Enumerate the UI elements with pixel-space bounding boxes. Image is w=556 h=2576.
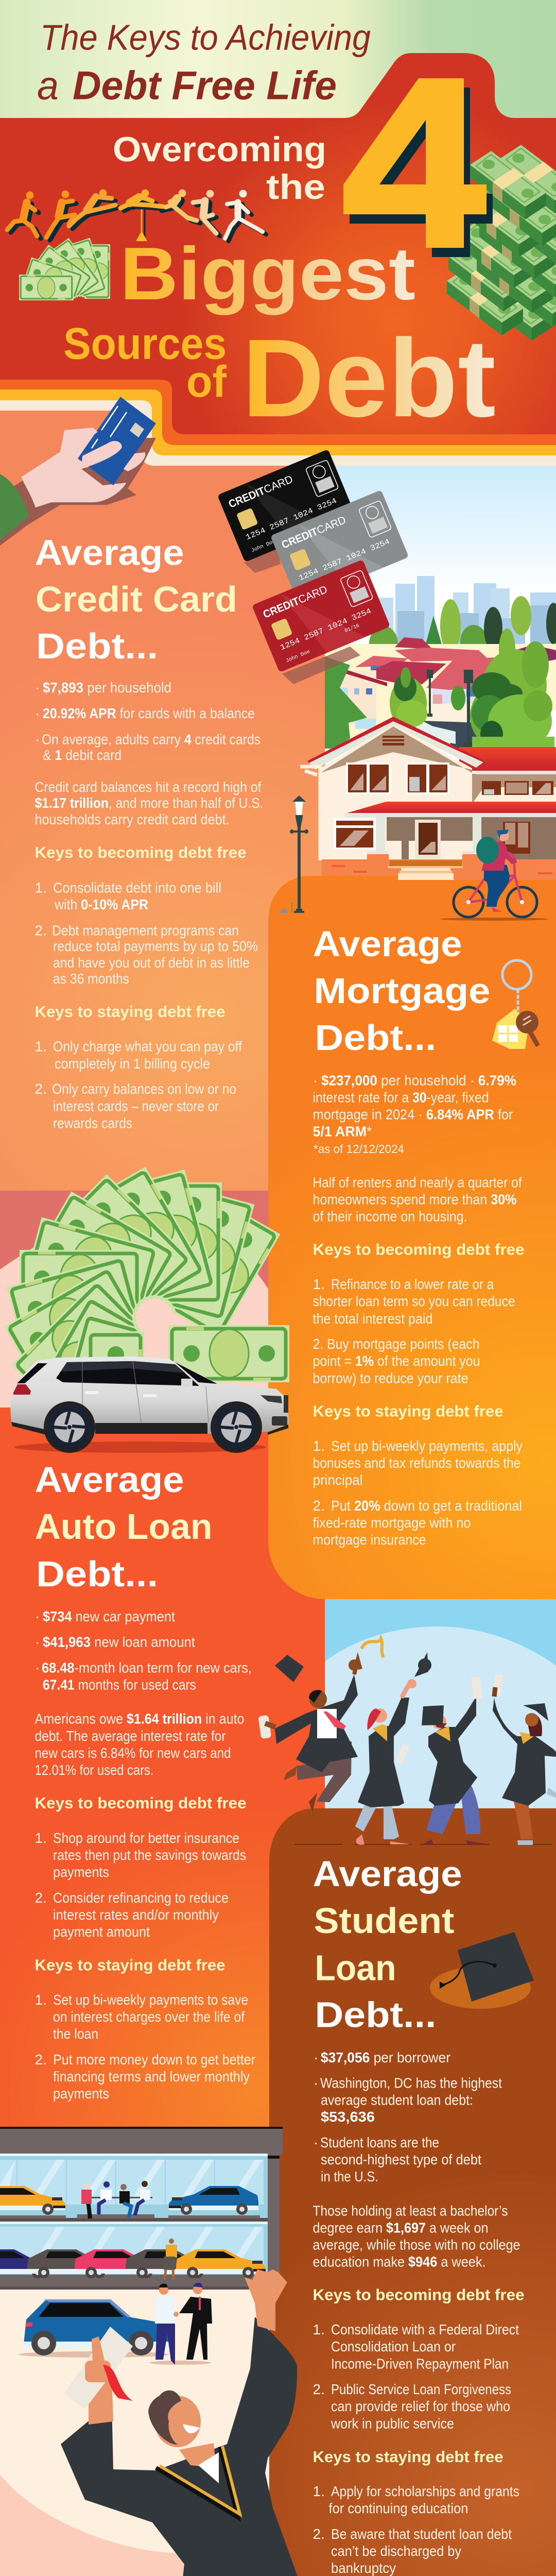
paragraph <box>313 1175 522 1224</box>
panel: car backdrop red band <box>0 1191 269 1408</box>
paragraph <box>35 1710 244 1778</box>
porch roof <box>347 802 556 813</box>
black card <box>217 449 356 562</box>
stats list: · <box>35 680 40 696</box>
black card: 1254 2587 1024 3254 <box>245 497 338 542</box>
card shadows <box>244 549 360 684</box>
stats list: · <box>35 1634 40 1650</box>
roof <box>0 2127 283 2129</box>
paragraph: 12.01% for used cars. <box>35 1762 153 1778</box>
illustration: car dealership <box>0 2127 283 2365</box>
keys to staying debt free: Put more money down to get better <box>53 2052 255 2067</box>
keys to staying debt free: payments <box>53 2086 109 2102</box>
heading: average credit card debt: Average <box>35 533 184 573</box>
keys to staying debt free: Only carry balances on low or no <box>52 1081 236 1097</box>
keys to becoming debt free: 2. Buy mortgage points (each <box>313 1336 480 1352</box>
hand shadow <box>0 438 156 546</box>
red card: 01/16 <box>344 623 360 634</box>
heading: average credit card debt: Credit Card <box>36 579 237 619</box>
stats <box>313 1073 516 1156</box>
keys to becoming debt free: 2. <box>35 922 47 939</box>
title: the keys to achieving a debt free life: Debt Free Life <box>73 63 337 108</box>
paragraph: $1.17 trillion, and more than half of U.S. <box>35 795 264 811</box>
stats list: 68.48-month loan term for new cars, <box>42 1660 252 1675</box>
pillar <box>268 2155 280 2290</box>
panel: salmon credit card background <box>0 392 325 1191</box>
standing man <box>164 2239 177 2279</box>
panel: car backdrop pink circle <box>0 1211 269 1408</box>
graduate: man jumping <box>258 1659 360 1812</box>
raised arm and hand <box>89 2269 287 2425</box>
hurdle <box>136 207 147 241</box>
red card: 1254 2587 1024 3254 <box>279 607 373 652</box>
keys to becoming debt free: Keys to becoming debt free <box>313 2285 524 2304</box>
keys to staying debt free: Keys to staying debt free <box>35 1956 225 1974</box>
stats list <box>314 2049 502 2184</box>
keys to staying debt free <box>313 1402 523 1548</box>
door <box>415 820 441 859</box>
icon: silver SUV <box>10 1357 289 1453</box>
keys to becoming debt free: Refinance to a lower rate or a <box>331 1276 494 1292</box>
icon: large money fan <box>4 1167 289 1452</box>
credit card hand illustration <box>0 397 156 546</box>
vent <box>383 736 404 745</box>
panel: graduation sky <box>325 1599 556 1810</box>
keys to staying debt free: for continuing education <box>328 2500 468 2516</box>
heading: average mortgage debt <box>313 924 490 1058</box>
heading: overcoming the: the <box>266 167 325 207</box>
keys to staying debt free: fixed-rate mortgage with no <box>313 1515 471 1531</box>
keys to becoming debt free: interest rates and/or monthly <box>53 1907 219 1923</box>
keys to staying debt free: can’t be discharged by <box>331 2543 461 2559</box>
sleeve <box>0 474 29 540</box>
keys to staying debt free: Put 20% down to get a traditional <box>331 1498 522 1514</box>
keys to becoming debt free <box>35 843 258 987</box>
keys to staying debt free: Keys to staying debt free <box>35 1003 225 1021</box>
graduate: man with beard <box>422 1676 483 1834</box>
street lamps in background <box>427 670 473 748</box>
keys to staying debt free <box>35 1003 242 1131</box>
panel text: student loan debt <box>313 1854 534 2576</box>
red card <box>252 560 390 672</box>
sill and arches <box>95 1423 207 1434</box>
stats list: $734 new car payment <box>43 1608 175 1624</box>
windows <box>56 1361 199 1386</box>
showroom cars <box>0 2186 266 2278</box>
paragraph: Half of renters and nearly a quarter of <box>313 1175 522 1190</box>
upper floor glass <box>0 2154 268 2218</box>
keys to staying debt free: Keys to staying debt free <box>313 1402 503 1420</box>
keys to staying debt free: on interest charges over the life of <box>53 2009 245 2025</box>
heading: average auto loan debt: Auto Loan <box>35 1506 212 1547</box>
brick base <box>322 859 556 880</box>
keys to staying debt free: 2. <box>35 1081 47 1097</box>
upper windows <box>346 762 449 794</box>
heading: average mortgage debt: Mortgage <box>314 971 490 1011</box>
keys to becoming debt free: Consolidation Loan or <box>331 2338 456 2354</box>
columns <box>376 817 385 851</box>
illustration: graduate with diploma <box>61 2269 311 2576</box>
keys to becoming debt free: 1. <box>313 2321 325 2337</box>
keys to becoming debt free: the total interest paid <box>313 1311 432 1327</box>
graduate: woman <box>355 1679 416 1839</box>
keys to staying debt free: principal <box>313 1472 362 1488</box>
gown <box>61 2317 311 2576</box>
keys to becoming debt free: borrow) to reduce your rate <box>313 1370 468 1386</box>
keys to becoming debt free: 1. <box>35 880 47 895</box>
yellow band <box>0 361 556 455</box>
title: the keys to achieving a debt free life <box>37 18 371 108</box>
stats list: Washington, DC has the highest <box>320 2075 502 2091</box>
paragraph: Those holding at least a bachelor’s <box>313 2203 508 2218</box>
title: the keys to achieving a debt free life: The Keys to Achieving <box>40 18 371 58</box>
runner shadows <box>11 199 266 241</box>
porch shadow <box>387 817 556 841</box>
illustration: graduates celebrating <box>258 1638 556 1845</box>
keys to becoming debt free: Public Service Loan Forgiveness <box>331 2381 511 2397</box>
stats list: $53,636 <box>321 2109 375 2125</box>
paragraph: education make $946 a week. <box>313 2253 486 2270</box>
red card: John Doe <box>285 649 311 664</box>
stats: 5/1 ARM* <box>313 1123 372 1140</box>
paragraph <box>35 779 264 827</box>
bicycle wheels <box>454 887 537 917</box>
keys to staying debt free: financing terms and lower monthly <box>53 2069 250 2084</box>
stats list: $41,963 new loan amount <box>43 1634 195 1650</box>
paragraph: Americans owe $1.64 trillion in auto <box>35 1710 244 1727</box>
keys to becoming debt free: Keys to becoming debt free <box>35 1794 246 1812</box>
grey card: CARD <box>315 514 348 536</box>
paragraph: households carry credit card debt. <box>35 811 230 827</box>
icon: cyclist <box>440 829 548 921</box>
keys to becoming debt free <box>313 1241 524 1386</box>
heading: average credit card debt <box>35 533 237 666</box>
rider <box>484 865 510 907</box>
stats list: · <box>314 2075 318 2091</box>
heading: average student loan debt <box>313 1854 462 2035</box>
keys to becoming debt free: Consolidate debt into one bill <box>53 880 221 895</box>
keys to staying debt free: 1. <box>313 1438 325 1454</box>
keys to becoming debt free: Keys to becoming debt free <box>35 843 246 861</box>
stats list: second-highest type of debt <box>321 2151 481 2167</box>
roof fascia <box>307 717 485 770</box>
heading: overcoming the <box>113 130 326 207</box>
runner silhouettes <box>7 190 263 239</box>
stats list: 67.41 months for used cars <box>43 1676 196 1693</box>
heading: average mortgage debt: Debt... <box>315 1018 437 1058</box>
grey card: CREDIT <box>280 526 320 551</box>
background trees <box>369 596 556 644</box>
keys to becoming debt free: shorter loan term so you can reduce <box>313 1293 515 1309</box>
icon: graduation cap <box>430 1932 534 2009</box>
black card: CREDIT <box>227 485 267 511</box>
orange band <box>0 361 556 445</box>
keys to becoming debt free: reduce total payments by up to 50% <box>53 938 258 954</box>
gutter <box>300 767 320 860</box>
heading: average student loan debt: Loan <box>315 1947 396 1988</box>
keys to becoming debt free: Income-Driven Repayment Plan <box>331 2355 509 2372</box>
paragraph: degree earn $1,697 a week on <box>313 2219 488 2236</box>
porch floor and steps <box>390 860 462 866</box>
icon: runners jumping a hurdle <box>7 190 266 241</box>
ground shadows <box>294 1844 552 1845</box>
paragraph: average, while those with no college <box>313 2237 520 2252</box>
wheels <box>47 1405 258 1449</box>
keys to becoming debt free: Consolidate with a Federal Direct <box>331 2321 519 2337</box>
grey card <box>270 490 409 603</box>
keys to becoming debt free: as 36 months <box>53 971 129 987</box>
paragraph: Credit card balances hit a record high of <box>35 779 262 795</box>
wing roof <box>459 747 556 771</box>
porch window <box>334 818 376 849</box>
keys to staying debt free: interest cards – never store or <box>53 1098 219 1114</box>
main wall <box>320 725 472 859</box>
customers at table <box>81 2181 152 2218</box>
keys to staying debt free: Set up bi-weekly payments, apply <box>331 1438 523 1454</box>
heading: sources of: Sources <box>63 319 227 369</box>
keys to staying debt free <box>35 1956 255 2102</box>
stats list: On average, adults carry 4 credit cards <box>42 732 260 747</box>
mortgage scene <box>300 576 556 880</box>
flying caps and stole <box>275 1638 431 1682</box>
keys to staying debt free: Be aware that student loan debt <box>331 2526 512 2542</box>
keys to becoming debt free: 2. <box>35 1890 47 1906</box>
stats list <box>35 680 260 763</box>
keys to becoming debt free: Keys to becoming debt free <box>313 1241 524 1258</box>
panel: student loan <box>269 1808 556 2576</box>
stats list: Student loans are the <box>320 2134 439 2150</box>
title: the keys to achieving a debt free life: a <box>37 63 59 108</box>
stats list: $7,893 per household <box>43 680 171 696</box>
heading: average auto loan debt <box>35 1460 212 1594</box>
stats list <box>35 1608 252 1693</box>
heading: overcoming the: Overcoming <box>113 130 326 169</box>
keys to becoming debt free: payments <box>53 1864 109 1880</box>
hand <box>21 428 126 507</box>
keys to becoming debt free: with 0-10% APR <box>54 896 148 912</box>
keys to becoming debt free: rates then put the savings towards <box>53 1847 246 1863</box>
red card: CREDIT <box>262 595 301 621</box>
red card: CARD <box>297 584 329 606</box>
paragraph <box>313 2203 520 2270</box>
heading: average auto loan debt: Average <box>35 1460 184 1500</box>
keys to becoming debt free <box>35 1794 246 1940</box>
stats: mortgage in 2024 · 6.84% APR for <box>313 1107 513 1122</box>
keys to becoming debt free: and have you out of debt in as little <box>53 955 250 971</box>
stats list: · <box>314 2049 318 2065</box>
black card: CARD <box>262 473 294 496</box>
face <box>148 2391 201 2447</box>
paragraph: homeowners spend more than 30% <box>313 1191 517 1208</box>
trees <box>390 629 554 752</box>
keys to becoming debt free: payment amount <box>53 1924 150 1940</box>
panel text: credit card debt <box>35 533 264 1131</box>
icon: lamp post <box>279 795 308 913</box>
shoes and lower legs <box>356 1834 533 1845</box>
mirror and handles <box>181 1379 193 1386</box>
heading: average student loan debt: Average <box>313 1854 462 1894</box>
icon: house keychain <box>492 960 538 1049</box>
keys to staying debt free: Set up bi-weekly payments to save <box>53 1992 248 2008</box>
heading: sources of: of <box>186 357 227 406</box>
panel: pink lower background <box>0 2463 269 2576</box>
paragraph: new cars is 6.84% for new cars and <box>35 1745 231 1761</box>
wing windows <box>482 781 553 795</box>
credit cards <box>217 449 409 684</box>
keys to staying debt free: 2. <box>313 1498 325 1514</box>
heading: sources of <box>63 319 227 406</box>
stats: interest rate for a 30-year, fixed <box>313 1089 489 1106</box>
stats list: average student loan debt: <box>321 2092 473 2108</box>
icon: money stacks <box>447 145 556 341</box>
fingers <box>81 441 122 469</box>
keys to becoming debt free: 1. <box>313 1276 325 1292</box>
stats list: in the U.S. <box>321 2168 378 2184</box>
wing wall <box>472 771 556 804</box>
keys to staying debt free: Keys to staying debt free <box>313 2448 503 2466</box>
keys to staying debt free: 1. <box>35 1039 47 1054</box>
panel: red title area <box>0 53 556 434</box>
panel text: auto loan debt <box>35 1460 255 2102</box>
keys to staying debt free: 2. <box>35 2052 47 2067</box>
blue card <box>78 397 156 485</box>
keys to staying debt free <box>313 2448 519 2576</box>
neck and collar <box>156 2443 240 2517</box>
keys to staying debt free: bonuses and tax refunds towards the <box>313 1455 521 1471</box>
stats list: · <box>35 705 40 721</box>
keys to staying debt free: 1. <box>35 1992 47 2008</box>
keys to becoming debt free: point = 1% of the amount you <box>313 1353 480 1369</box>
panel text: mortgage debt <box>313 924 538 1548</box>
keys to staying debt free: Only charge what you can pay off <box>53 1039 242 1054</box>
keys to staying debt free: completely in 1 billing cycle <box>55 1056 210 1072</box>
heading: average mortgage debt: Average <box>313 924 462 964</box>
stats list: $37,056 per borrower <box>321 2049 450 2065</box>
cream band <box>0 361 556 466</box>
big number 4 <box>343 78 493 257</box>
paragraph: of their income on housing. <box>313 1209 467 1224</box>
header banner: green gradient <box>0 0 556 155</box>
panel: auto loan background <box>0 1408 325 2129</box>
keys to staying debt free: bankruptcy <box>331 2560 396 2576</box>
heading: debt: Debt <box>242 316 496 440</box>
keys to becoming debt free: Debt management programs can <box>52 922 239 939</box>
panel: mortgage <box>268 876 556 1599</box>
graduation backdrop circle <box>325 1626 556 1808</box>
lower floor glass <box>0 2222 268 2275</box>
keys to staying debt free: the loan <box>53 2026 98 2042</box>
heading: average auto loan debt: Debt... <box>36 1554 158 1594</box>
keys to staying debt free: mortgage insurance <box>313 1532 426 1548</box>
keys to becoming debt free: Consider refinancing to reduce <box>53 1890 229 1906</box>
paragraph: debt. The average interest rate for <box>35 1728 225 1744</box>
main house <box>300 717 556 880</box>
lamps <box>13 1384 31 1395</box>
stats list: · <box>35 1660 40 1675</box>
keys to becoming debt free: 1. <box>35 1830 47 1846</box>
graduate: woman with long hair <box>492 1674 556 1839</box>
heading: biggest: Biggest <box>120 232 415 315</box>
city skyline <box>378 576 556 644</box>
panel: cream dealership forecourt <box>0 2287 269 2553</box>
heading: average credit card debt: Debt... <box>36 626 158 666</box>
keys to becoming debt free: work in public service <box>331 2415 454 2432</box>
diploma scroll <box>64 2327 133 2409</box>
keys to becoming debt free <box>313 2285 524 2432</box>
heading: average student loan debt: Debt... <box>315 1995 437 2035</box>
keys to staying debt free: rewards cards <box>53 1115 132 1131</box>
stats list: · <box>35 732 40 747</box>
stats: *as of 12/12/2024 <box>314 1142 404 1156</box>
blue car and handshake <box>19 2283 212 2365</box>
heading: average student loan debt: Student <box>314 1901 454 1941</box>
far shuttered window <box>503 822 530 854</box>
stats list: 20.92% APR for cards with a balance <box>43 705 255 721</box>
gable <box>320 726 472 773</box>
keys to staying debt free: 1. <box>313 2483 325 2499</box>
neighbourhood houses <box>325 637 556 750</box>
black card: John Doe <box>250 538 276 554</box>
stats list: · <box>35 1608 40 1624</box>
keys to becoming debt free: can provide relief for those who <box>331 2398 510 2414</box>
stats: · $237,000 per household · 6.79% <box>313 1073 516 1088</box>
icon: money fan small <box>19 238 110 300</box>
stats list: · <box>314 2134 318 2150</box>
stats list: & 1 debit card <box>43 747 121 763</box>
panel: mortgage scene sky <box>325 438 556 881</box>
keys to staying debt free: Apply for scholarships and grants <box>331 2483 519 2499</box>
keys to becoming debt free: Shop around for better insurance <box>53 1830 239 1846</box>
keys to staying debt free: 2. <box>313 2526 325 2542</box>
grey card: 1254 2587 1024 3254 <box>298 537 391 583</box>
keys to becoming debt free: 2. <box>313 2381 325 2397</box>
